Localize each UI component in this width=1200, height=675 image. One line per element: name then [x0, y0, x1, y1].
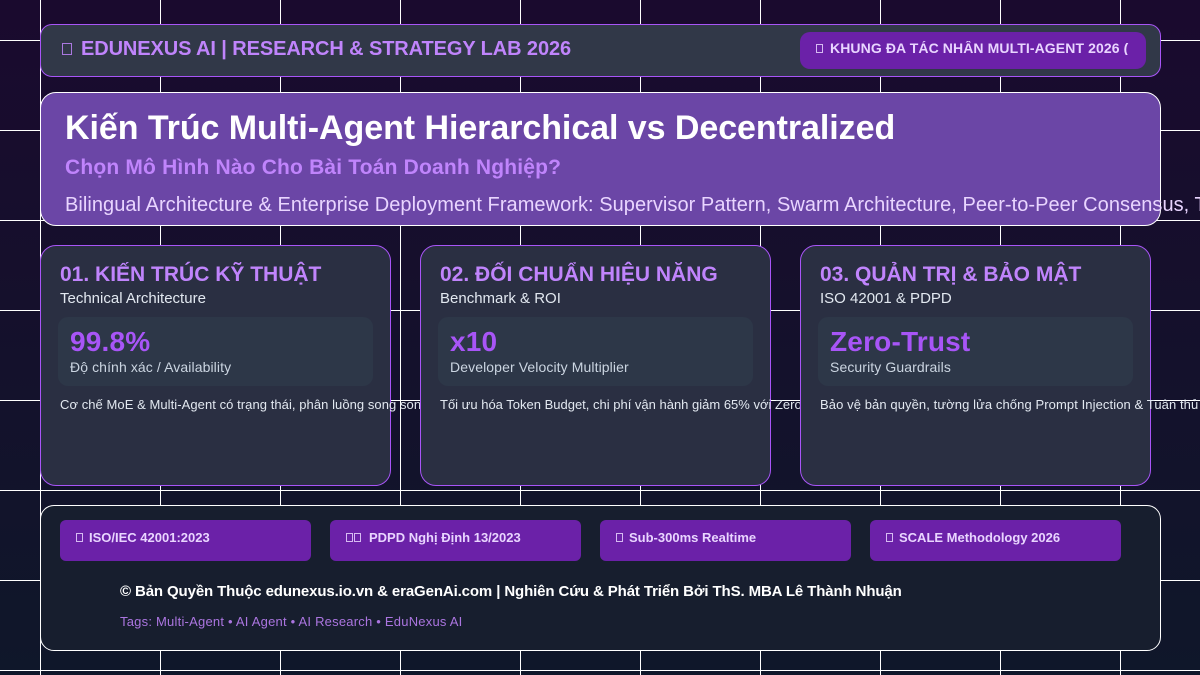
chip text: ISO/IEC 42001:2023: [89, 530, 210, 545]
stat box: Zero-Trust: [818, 317, 1133, 386]
stat box: x10: [438, 317, 753, 386]
header brand text: EDUNEXUS AI | RESEARCH & STRATEGY LAB 2026: [81, 38, 571, 60]
stat value: Zero-Trust: [830, 326, 970, 357]
chip text: PDPD Nghị Định 13/2023: [369, 530, 521, 545]
subtitle: Chọn Mô Hình Nào Cho Bài Toán Doanh Nghiệp?: [65, 156, 561, 179]
main title: Kiến Trúc Multi-Agent Hierarchical vs Decentralized: [65, 109, 895, 147]
hero banner: [40, 92, 1161, 226]
tags line: Tags: Multi-Agent • AI Agent • AI Research • EduNexus AI: [120, 614, 462, 629]
stat label: Security Guardrails: [830, 359, 951, 375]
header bar: [40, 24, 1161, 77]
card 01: technical architecture: [40, 245, 391, 486]
footer panel: [40, 505, 1161, 651]
chip: realtime: [600, 520, 851, 561]
stat value: 99.8%: [70, 326, 150, 357]
card subheading: ISO 42001 & PDPD: [820, 290, 952, 307]
card description: Tối ưu hóa Token Budget, chi phí vận hành giảm 65% với Zero-Copy: [440, 397, 836, 412]
card 02: benchmark: [420, 245, 771, 486]
chip text: Sub-300ms Realtime: [629, 530, 756, 545]
card heading: 01. KIẾN TRÚC KỸ THUẬT: [60, 263, 321, 286]
card heading: 03. QUẢN TRỊ & BẢO MẬT: [820, 263, 1081, 286]
card description: Cơ chế MoE & Multi-Agent có trạng thái, phân luồng song song: [60, 397, 428, 412]
copyright line: © Bản Quyền Thuộc edunexus.io.vn & eraGenAi.com | Nghiên Cứu & Phát Triển Bởi ThS. MBA Lê Thành Nhuận: [120, 583, 902, 600]
chip: SCALE: [870, 520, 1121, 561]
card 03: governance and security: [800, 245, 1151, 486]
card heading: 02. ĐỐI CHUẨN HIỆU NĂNG: [440, 263, 718, 286]
stat label: Developer Velocity Multiplier: [450, 359, 629, 375]
stat value: x10: [450, 326, 497, 357]
chip: PDPD: [330, 520, 581, 561]
card subheading: Technical Architecture: [60, 290, 206, 307]
card subheading: Benchmark & ROI: [440, 290, 561, 307]
stat box: 99.8%: [58, 317, 373, 386]
chip text: SCALE Methodology 2026: [899, 530, 1060, 545]
stat label: Độ chính xác / Availability: [70, 359, 231, 375]
chip: ISO: [60, 520, 311, 561]
framework badge: [800, 32, 1146, 69]
